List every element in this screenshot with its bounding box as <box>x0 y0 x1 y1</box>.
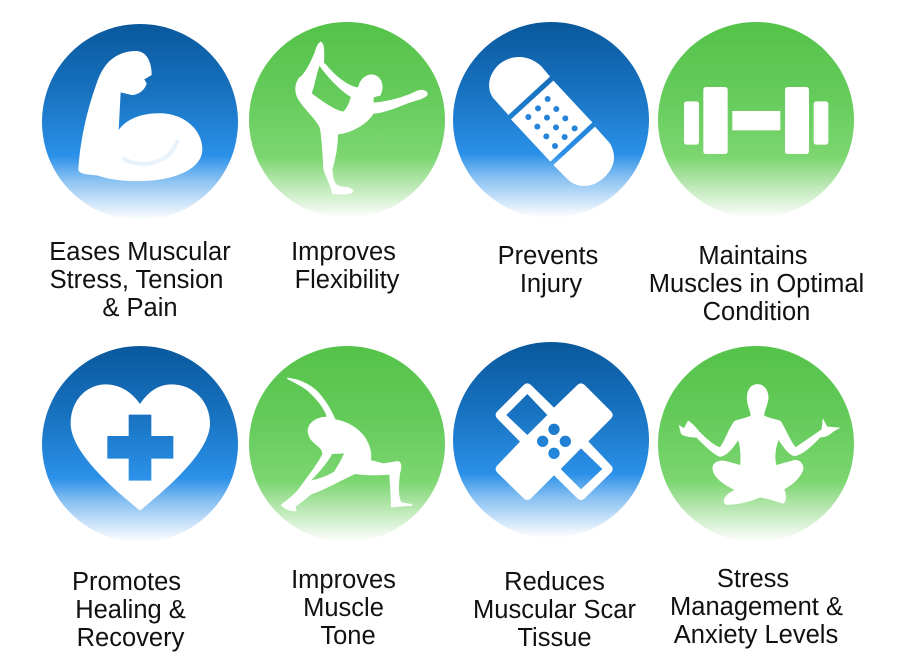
label <box>291 566 396 650</box>
icon: dumbbell <box>684 87 828 154</box>
label: Muscle <box>303 594 384 622</box>
green circle <box>658 22 854 218</box>
panel: eases muscular stress <box>42 24 238 322</box>
panel: improves muscle tone <box>249 346 445 650</box>
label: Management & <box>670 593 843 621</box>
green circle <box>658 346 854 542</box>
label: Muscles in Optimal <box>649 270 864 298</box>
label: Reduces <box>504 568 605 596</box>
label: Tone <box>320 622 376 650</box>
icon: flexed arm <box>78 51 202 181</box>
label: Recovery <box>77 624 185 652</box>
panel: promotes healing <box>42 346 238 652</box>
label: Injury <box>520 270 582 298</box>
panel: stress management <box>658 346 854 649</box>
icon: crossed bandages <box>496 383 613 500</box>
label: Stress <box>717 565 789 593</box>
label: Tissue <box>517 624 592 652</box>
label: Eases Muscular <box>49 238 231 266</box>
icon: bandage <box>489 57 614 186</box>
label <box>72 568 186 652</box>
icon: heart with cross <box>71 384 210 511</box>
green circle <box>249 22 445 218</box>
label: Maintains <box>698 242 808 270</box>
label: Prevents <box>498 242 598 270</box>
label: Flexibility <box>295 266 400 294</box>
label: Improves <box>291 238 396 266</box>
panel: reduces scar tissue <box>453 342 649 652</box>
label <box>498 242 598 298</box>
label: & Pain <box>102 294 178 322</box>
label: Healing & <box>75 596 186 624</box>
panel: improves flexibility <box>249 22 445 294</box>
label <box>49 238 231 322</box>
blue circle <box>42 24 238 220</box>
label: Condition <box>703 298 810 326</box>
label: Stress, Tension <box>50 266 223 294</box>
panel: prevents injury <box>453 22 649 298</box>
icon: dancer yoga pose <box>296 42 427 194</box>
panel: maintains muscles <box>649 22 864 326</box>
label: Improves <box>291 566 396 594</box>
blue circle <box>453 22 649 218</box>
label <box>670 565 843 649</box>
blue circle <box>42 346 238 542</box>
icon: meditating figure <box>680 385 838 504</box>
label: Muscular Scar <box>473 596 636 624</box>
label <box>473 568 636 652</box>
label <box>649 242 864 326</box>
icon: side-angle yoga pose <box>282 378 412 511</box>
green circle <box>249 346 445 542</box>
label: Promotes <box>72 568 181 596</box>
blue circle <box>453 342 649 538</box>
label: Anxiety Levels <box>674 621 838 649</box>
label <box>291 238 400 294</box>
